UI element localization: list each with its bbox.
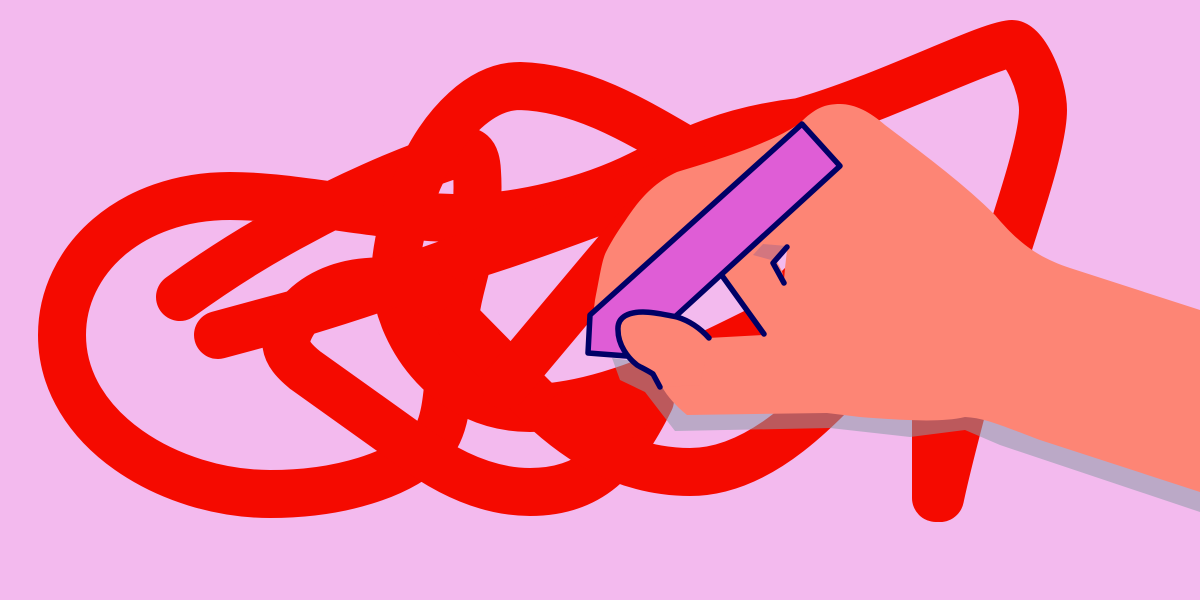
hand shadow: [612, 358, 1200, 512]
hand: [590, 104, 1200, 492]
crayon: [588, 124, 840, 357]
gap between fingers: red: [782, 268, 785, 280]
hand outlines: [618, 247, 787, 387]
gap between fingers: pink: [777, 250, 787, 271]
red scribble: [62, 44, 1043, 498]
crayon shadow on hand: [753, 244, 787, 261]
thumb: [617, 312, 710, 387]
